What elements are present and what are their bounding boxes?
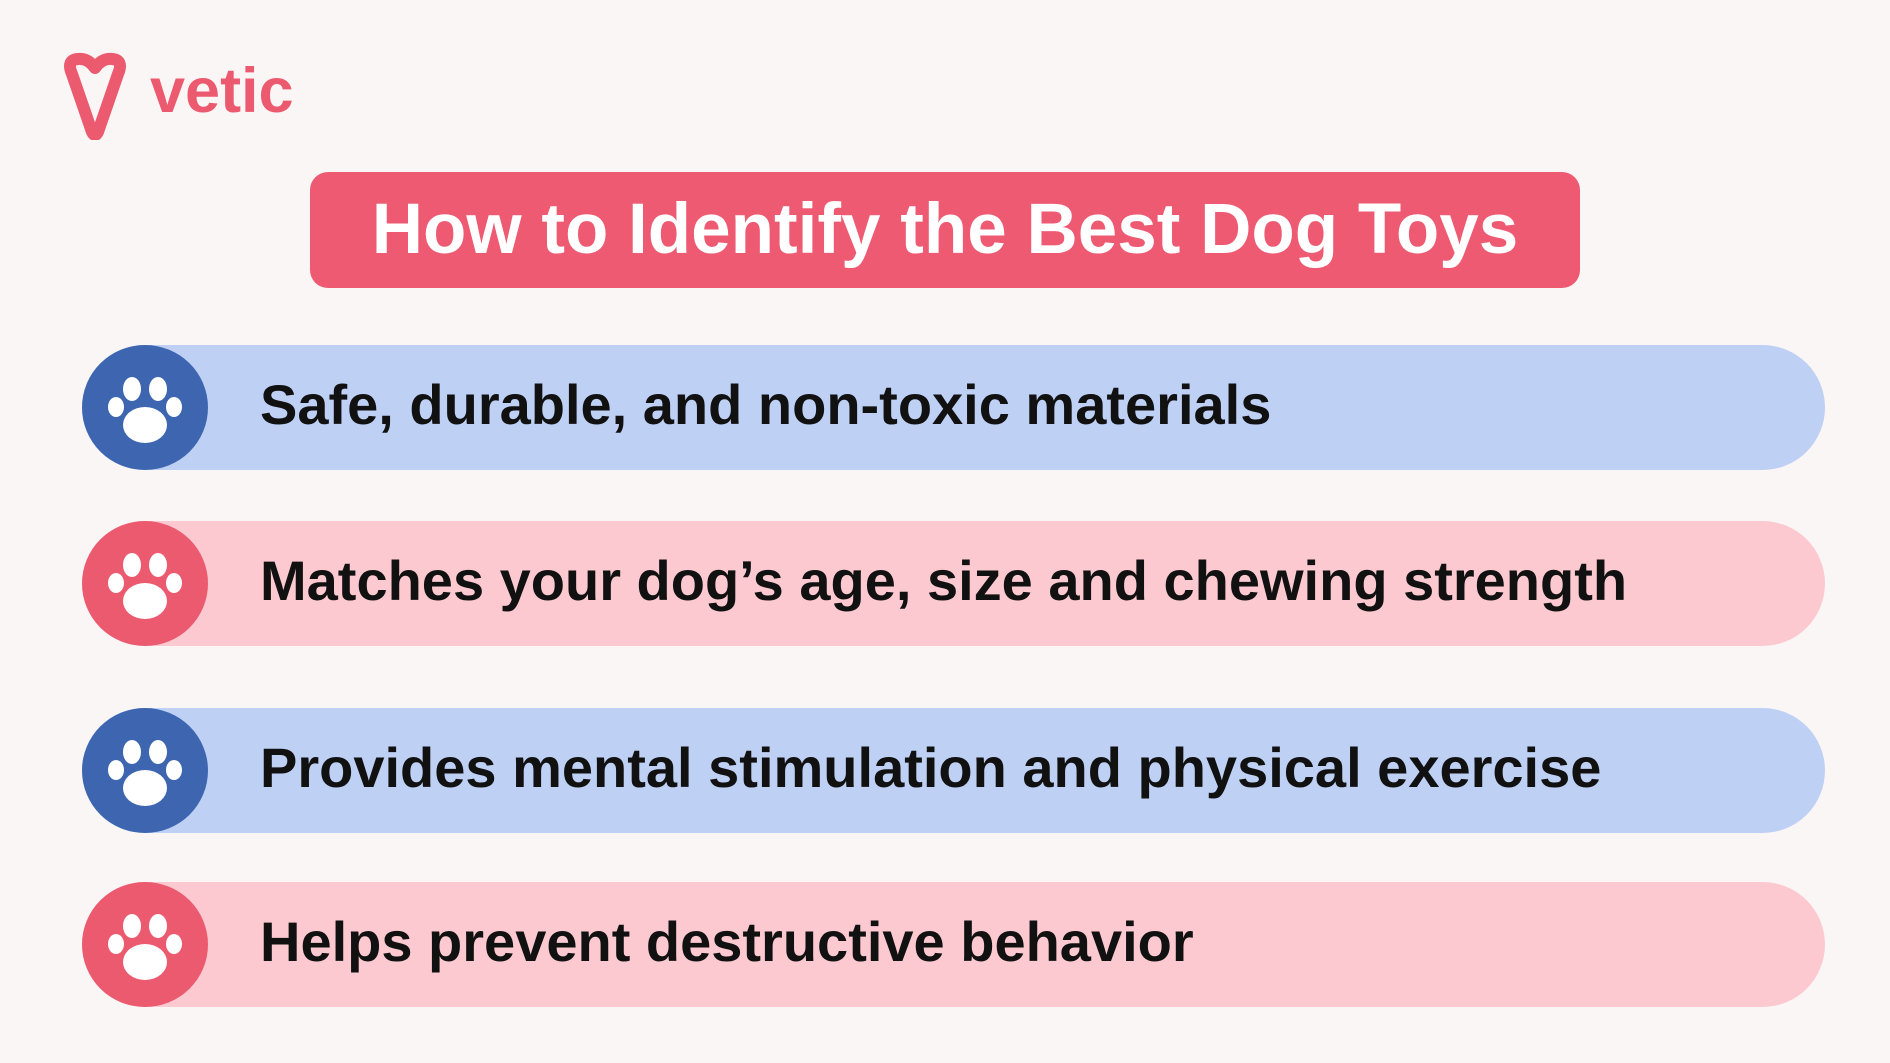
icon: paw xyxy=(82,882,208,1007)
logo xyxy=(64,52,294,140)
icon: paw xyxy=(82,521,208,646)
title: How to Identify the Best Dog Toys xyxy=(372,190,1518,269)
text: Matches your dog’s age, size and chewing strength xyxy=(260,549,1627,612)
text: Provides mental stimulation and physical exercise xyxy=(260,736,1601,799)
logo text: vetic xyxy=(150,56,294,126)
row 4 xyxy=(82,882,1825,1007)
text: Safe, durable, and non-toxic materials xyxy=(260,373,1271,436)
icon: heart V xyxy=(64,52,126,140)
title xyxy=(310,172,1580,288)
icon: paw xyxy=(82,345,208,470)
text: Helps prevent destructive behavior xyxy=(260,910,1194,973)
row 3 xyxy=(82,708,1825,833)
icon: paw xyxy=(82,708,208,833)
row 1 xyxy=(82,345,1825,470)
row 2 xyxy=(82,521,1825,646)
